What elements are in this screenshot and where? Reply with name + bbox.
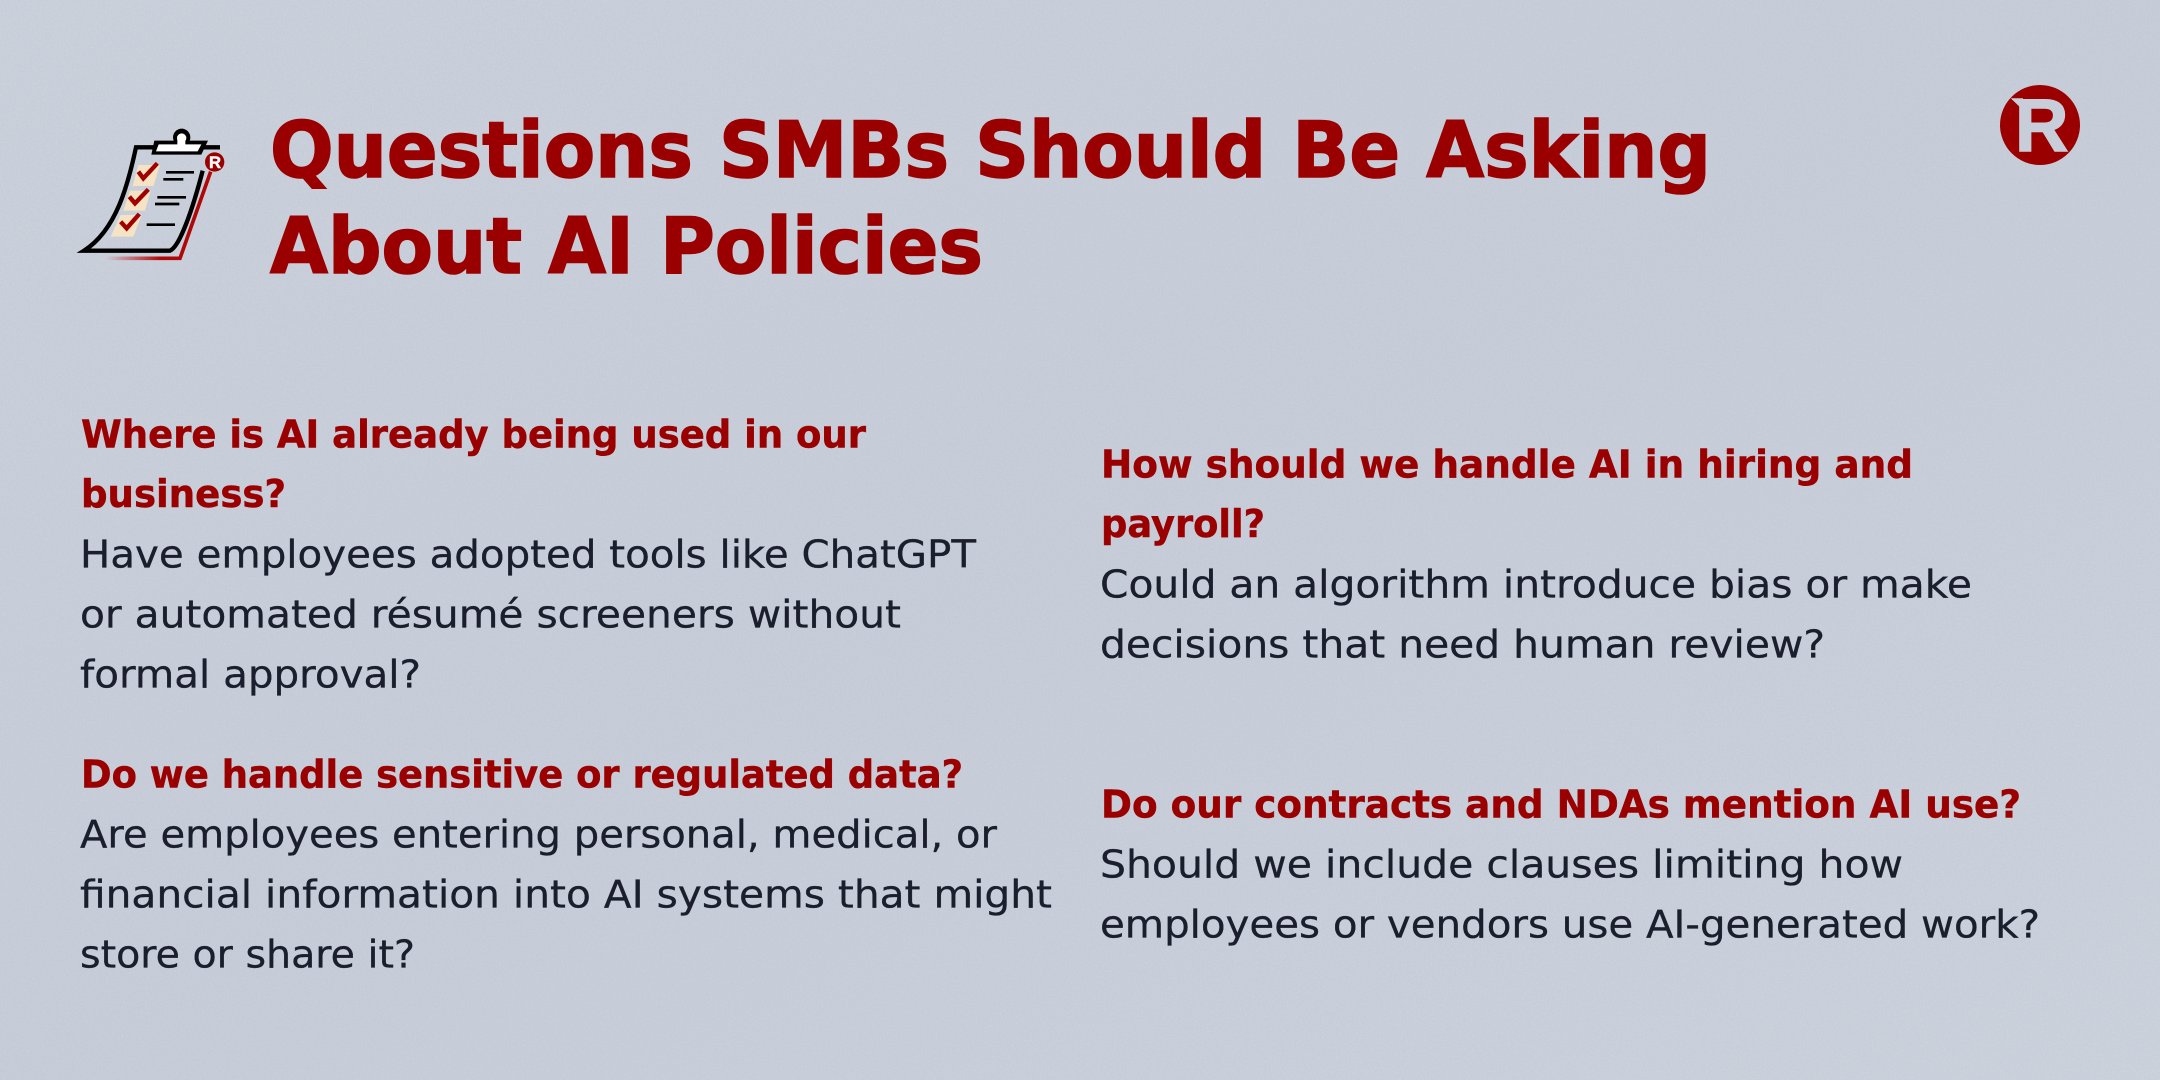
- question block: AI already in use: Where is AI already being used in our: [81, 412, 866, 456]
- question block: hiring and payroll: payroll?: [1101, 502, 1265, 546]
- red offset page edge: [105, 172, 211, 258]
- question block: sensitive data: [80, 752, 1052, 978]
- question block: AI already in use: [80, 412, 977, 698]
- question block: hiring and payroll: Could an algorithm introduce bias or make: [1100, 562, 1972, 608]
- question block: AI already in use: or automated résumé screeners without: [80, 592, 901, 638]
- title: [270, 106, 1711, 292]
- question block: hiring and payroll: How should we handle AI in hiring and: [1101, 442, 1913, 486]
- question block: sensitive data: Are employees entering personal, medical, or: [80, 812, 997, 858]
- question block: contracts and NDAs: Do our contracts and NDAs mention AI use?: [1101, 782, 2021, 826]
- question block: contracts and NDAs: [1100, 782, 2040, 948]
- question block: sensitive data: store or share it?: [80, 932, 415, 978]
- clip: [151, 129, 208, 155]
- icon: clipboard checklist: [84, 129, 224, 258]
- question block: sensitive data: financial information into AI systems that might: [80, 872, 1052, 918]
- question block: sensitive data: Do we handle sensitive or regulated data?: [81, 752, 963, 796]
- checklist rows: [111, 163, 194, 237]
- logo: R: [2015, 84, 2068, 167]
- badge: [205, 152, 224, 172]
- logo: [2000, 84, 2080, 167]
- page outline: [84, 147, 220, 251]
- question block: hiring and payroll: decisions that need human review?: [1100, 622, 1825, 668]
- title: Questions SMBs Should Be Asking: [270, 106, 1711, 196]
- question block: AI already in use: formal approval?: [80, 652, 421, 698]
- title: About AI Policies: [270, 202, 983, 292]
- question block: hiring and payroll: [1100, 442, 1972, 668]
- question block: contracts and NDAs: employees or vendors use AI-generated work?: [1100, 902, 2040, 948]
- badge: R: [209, 153, 221, 172]
- question block: AI already in use: business?: [81, 472, 286, 516]
- question block: contracts and NDAs: Should we include clauses limiting how: [1100, 842, 1903, 888]
- question block: AI already in use: Have employees adopted tools like ChatGPT: [80, 532, 977, 578]
